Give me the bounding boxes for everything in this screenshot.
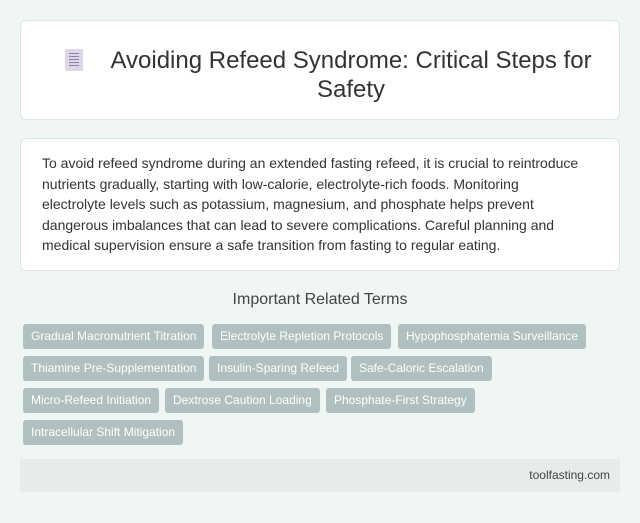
description text: To avoid refeed syndrome during an extended fasting refeed, it is crucial to reintroduce nutrients gradually, starting with low-calorie, electrolyte-rich foods. Monitoring electrolyte levels such as potassium, magnesium, and phosphate helps prevent dangerous imbalances that can lead to severe complications. Careful planning and medical supervision ensure a safe transition from fasting to regular eating. bbox=[42, 155, 578, 253]
footer: toolfasting.com bbox=[529, 468, 610, 482]
tags: Gradual Macronutrient Titration bbox=[31, 329, 196, 343]
related terms heading: Important Related Terms bbox=[233, 291, 407, 308]
description card bbox=[20, 138, 620, 271]
tags: Electrolyte Repletion Protocols bbox=[220, 329, 383, 343]
tags: Micro-Refeed Initiation bbox=[31, 393, 151, 407]
tags: Thiamine Pre-Supplementation bbox=[31, 361, 196, 375]
tags: Intracellular Shift Mitigation bbox=[31, 425, 175, 439]
tags: Phosphate-First Strategy bbox=[334, 393, 467, 407]
tags: Safe-Caloric Escalation bbox=[359, 361, 484, 375]
tags: Insulin-Sparing Refeed bbox=[217, 361, 339, 375]
footer bbox=[20, 459, 620, 492]
title: Avoiding Refeed Syndrome: Critical Steps for Safety bbox=[110, 47, 592, 103]
tags: Hypophosphatemia Surveillance bbox=[406, 329, 578, 343]
tags: Dextrose Caution Loading bbox=[173, 393, 312, 407]
title card bbox=[20, 20, 620, 120]
icon: document bbox=[65, 49, 83, 71]
